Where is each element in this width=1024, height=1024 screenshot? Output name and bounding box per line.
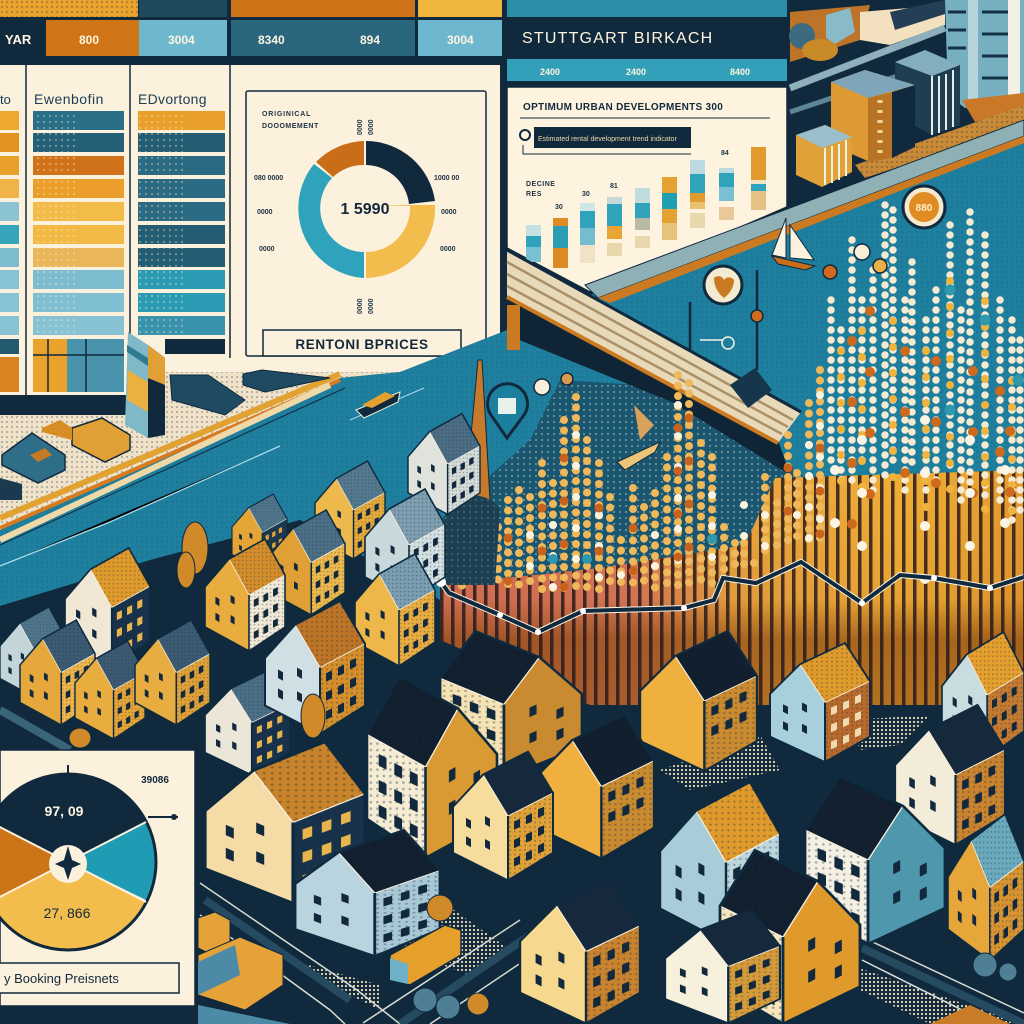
small boat [356, 392, 400, 418]
donut centre value: 1 5990 [341, 201, 390, 218]
pie caption: y Booking Preisnets [4, 971, 119, 986]
chart legend label [520, 127, 691, 154]
block orange [831, 70, 915, 162]
bridge [507, 250, 801, 443]
header table: 8340 [258, 33, 285, 47]
houses: front row [295, 776, 1024, 1024]
orange roof corner [930, 1005, 1010, 1024]
upper right quarter: tower and blocks [585, 0, 1024, 303]
column heading: Ewenbotin: Ewenbofin [34, 91, 104, 107]
donut chart: 0000 [441, 209, 457, 216]
header table: 2400 [540, 67, 560, 77]
donut chart: 0000 [259, 246, 275, 253]
panel: urban development chart: RES [526, 191, 542, 198]
header table: 8400 [730, 67, 750, 77]
block slate [895, 50, 960, 135]
column heading: EDvortong: EDvortong [138, 91, 207, 107]
donut chart: 1000 00 [434, 175, 459, 182]
panel: urban development chart: 81 [610, 183, 618, 190]
donut chart: 0000 [368, 119, 375, 135]
table bars: column two [33, 111, 124, 392]
pie chart [0, 765, 178, 950]
lamp posts [690, 270, 757, 370]
striped bar chart [440, 470, 1024, 705]
pie caption [0, 963, 179, 993]
panel: urban development chart: DECINE [526, 181, 555, 188]
line chart [436, 562, 1024, 635]
header table [0, 0, 787, 81]
pie value bottom: 27, 866 [44, 905, 91, 921]
pin: map marker heart [704, 266, 742, 304]
table bars: column one [0, 111, 19, 392]
dot columns chart [451, 205, 1020, 590]
church spire [445, 360, 500, 585]
houses: middle row [205, 631, 1024, 903]
side value: 39086 [141, 775, 169, 786]
pin: parking marker [488, 384, 528, 438]
stippled paving [290, 715, 1024, 1024]
panel: urban development chart [507, 87, 787, 292]
table bars: column three [138, 111, 225, 354]
truck on bridge [730, 368, 772, 408]
lower left shore with small warehouses [0, 332, 400, 545]
block small [796, 125, 852, 187]
pie value top: 97, 09 [45, 803, 84, 819]
donut chart: 0000 [257, 209, 273, 216]
panel: urban development chart: 30 [555, 204, 563, 211]
river [0, 125, 1024, 620]
warehouse blue [2, 433, 65, 483]
donut chart: ORIGINICAL [262, 111, 311, 118]
donut chart: DOOOMEMENT [262, 123, 319, 130]
houses: back row [0, 414, 480, 775]
pin: map marker orange: 880 [916, 203, 933, 214]
barges [170, 375, 245, 415]
donut caption: rental prices: RENTONI BPRICES [295, 337, 429, 352]
donut chart: 0000 [357, 119, 364, 135]
chart legend label: Estimated rental development trend indicator [538, 136, 678, 143]
bushes [413, 895, 1017, 1019]
donut chart [246, 91, 486, 356]
upper plot orange [790, 5, 870, 62]
sailboat [772, 218, 815, 270]
header table: STUTTGART BIRKACH [522, 30, 713, 47]
chart title: OPTIMUM URBAN DEVELOPMENTS 300 [523, 102, 723, 113]
boat yellow [617, 405, 660, 470]
orange trees [69, 522, 325, 748]
panel: urban development chart: 84 [721, 150, 729, 157]
donut chart: 080 0000 [254, 175, 283, 182]
donut chart: 0000 [440, 246, 456, 253]
dark stippled water behind dots [440, 380, 830, 600]
panel: rental table and donut [0, 60, 502, 395]
tower [945, 0, 1024, 122]
warehouse yellow [72, 418, 130, 462]
small circle marker on water [700, 337, 734, 349]
donut caption: rental prices [263, 330, 461, 356]
header table: YAR [5, 32, 32, 47]
quay [585, 120, 1024, 298]
header table: 2400 [626, 67, 646, 77]
stacked bars [526, 147, 766, 268]
gold stipple ground [855, 105, 1024, 178]
column heading: partial: to [0, 92, 11, 107]
donut chart: 0000 [368, 298, 375, 314]
header table: 894 [360, 33, 380, 47]
donut chart: 0000 [357, 298, 364, 314]
panel: urban development chart: 30 [582, 191, 590, 198]
header table: 3004 [168, 33, 195, 47]
warehouse edge [0, 478, 22, 500]
tilted tower [125, 332, 148, 438]
trees and shed [789, 23, 815, 49]
header table: 3004 [447, 33, 474, 47]
bridge underside [507, 297, 790, 475]
panel: booking prices pie [0, 750, 195, 1006]
header table: 800 [79, 33, 99, 47]
yellow bus [390, 925, 461, 985]
delivery boxes [198, 912, 283, 1010]
town ground [0, 520, 1024, 1024]
warehouse small [42, 420, 72, 440]
pin: map marker orange [903, 186, 945, 228]
